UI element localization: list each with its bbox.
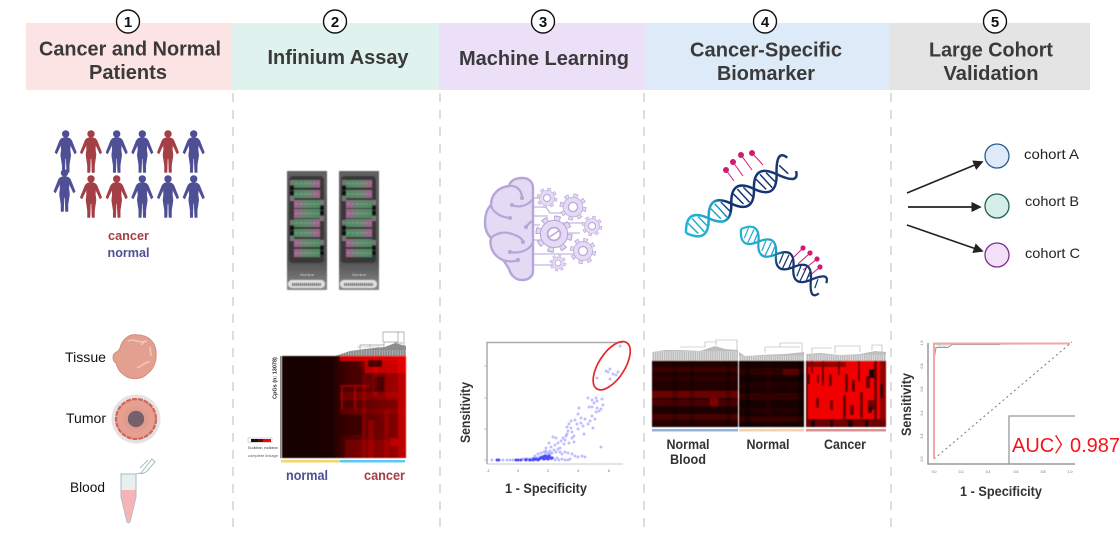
heading 1: Cancer and Normal Patients bbox=[39, 38, 221, 84]
icon: brain with gears bbox=[485, 178, 600, 280]
label: Normal: Normal bbox=[746, 437, 790, 452]
label: Blood: Blood bbox=[70, 479, 105, 495]
heading 1: Cancer and Normal Patients: Cancer and Normal bbox=[39, 38, 221, 60]
methyl groups on large helix bbox=[723, 150, 763, 181]
chart: normal blood heatmap bbox=[652, 340, 738, 432]
cohort A circle bbox=[985, 144, 1009, 168]
highlighted cluster ellipse bbox=[586, 336, 638, 396]
chart: normal heatmap bbox=[739, 343, 804, 432]
step number 2: 2 bbox=[331, 14, 339, 31]
axis label: 1 - Specificity: 1 - Specificity bbox=[505, 480, 587, 496]
step number 3: 3 bbox=[539, 14, 547, 31]
chart: ROC curve: 0.2 bbox=[959, 470, 963, 474]
step number 5: 5 bbox=[991, 14, 999, 31]
step number 3 bbox=[532, 10, 554, 33]
label: cohort A: cohort A bbox=[1024, 146, 1080, 162]
icon: tissue bbox=[113, 335, 156, 379]
label: cohort C: cohort C bbox=[1025, 245, 1080, 261]
heatmap dendrogram bbox=[335, 332, 406, 356]
arrow to cohort C bbox=[907, 225, 982, 251]
label: Cancer: Cancer bbox=[824, 437, 867, 452]
step number 5 bbox=[984, 10, 1006, 33]
step number 1 bbox=[116, 10, 140, 33]
chart: ROC curve: 0.8 bbox=[1041, 470, 1045, 474]
step number 1: 1 bbox=[124, 14, 132, 31]
label: cancer: cancer bbox=[364, 467, 405, 483]
chart: ROC curve bbox=[920, 341, 1075, 474]
icon: tumor bbox=[112, 394, 160, 444]
heading 4: Cancer-Specific Biomarker bbox=[690, 40, 842, 85]
icon: sequencer chips: Illumina bbox=[352, 272, 367, 277]
large helix bbox=[679, 153, 799, 244]
chart: scatter plot: 0 bbox=[517, 469, 519, 473]
label: normal: normal bbox=[286, 467, 328, 483]
heading 3: Machine Learning: Machine Learning bbox=[459, 48, 629, 70]
heatmap colour key: complete linkage bbox=[248, 454, 278, 458]
methyl groups on small helix bbox=[794, 245, 823, 277]
icon: blood tube bbox=[121, 459, 155, 523]
cohort C circle bbox=[985, 243, 1009, 267]
icon: DNA with methyl groups bbox=[679, 150, 829, 297]
chart: scatter plot: 2 bbox=[547, 469, 549, 473]
label: CpGs axis: CpGs (n: 13078) bbox=[272, 357, 278, 399]
label: Normal Blood: Normal bbox=[666, 437, 710, 452]
arrow to cohort A bbox=[907, 162, 982, 193]
chart: ROC curve: 0.0 bbox=[920, 457, 924, 461]
chart: ROC curve: 0.8 bbox=[920, 364, 924, 368]
chart: scatter plot bbox=[484, 336, 638, 473]
icon: patient figures bbox=[54, 131, 205, 218]
chart: ROC curve: 0.6 bbox=[1014, 470, 1018, 474]
heading 5: Large Cohort Validation: Validation bbox=[944, 63, 1038, 85]
arrow to cohort B bbox=[908, 206, 980, 208]
label: Tumor: Tumor bbox=[66, 410, 106, 426]
chart: CpG heatmap bbox=[280, 332, 406, 462]
heading 1: Cancer and Normal Patients: Patients bbox=[89, 62, 167, 84]
chart: scatter plot: -2 bbox=[486, 469, 490, 473]
callout: AUC value: 0.987 bbox=[1070, 435, 1120, 457]
step number 2 bbox=[324, 10, 346, 33]
callout: AUC value: AUC bbox=[1012, 435, 1054, 457]
chart: scatter plot: 4 bbox=[577, 469, 579, 473]
legend: cancer / normal: cancer bbox=[108, 228, 149, 243]
heading 5: Large Cohort Validation bbox=[929, 40, 1053, 85]
heading 4: Cancer-Specific Biomarker: Biomarker bbox=[717, 63, 815, 85]
label: Normal Blood: Blood bbox=[670, 452, 706, 467]
chart: ROC curve: 0.4 bbox=[920, 411, 924, 415]
label: Tissue: Tissue bbox=[65, 349, 106, 365]
chart: ROC curve: 1.0 bbox=[1068, 470, 1072, 474]
chart: ROC curve: 0.0 bbox=[932, 470, 936, 474]
chart: ROC curve: 0.2 bbox=[920, 434, 924, 438]
heatmap colour key: Euclidean, euclidean bbox=[248, 446, 278, 450]
heading 5: Large Cohort Validation: Large Cohort bbox=[929, 40, 1053, 62]
chart: cancer heatmap bbox=[806, 345, 886, 432]
small helix bbox=[735, 220, 829, 297]
legend: cancer / normal bbox=[108, 228, 150, 260]
cohort B circle bbox=[985, 194, 1009, 218]
heading 2: Infinium Assay: Infinium Assay bbox=[268, 47, 409, 69]
legend: cancer / normal: normal bbox=[108, 245, 150, 260]
chart: scatter plot: 6 bbox=[608, 469, 610, 473]
icon: sequencer chips: Illumina bbox=[300, 272, 315, 277]
chart: ROC curve: 0.4 bbox=[986, 470, 990, 474]
axis label: Sensitivity: Sensitivity bbox=[898, 373, 914, 436]
step number 4 bbox=[754, 10, 776, 33]
chart: ROC curve: 1.0 bbox=[920, 341, 924, 345]
step number 4: 4 bbox=[761, 14, 770, 31]
heading 4: Cancer-Specific Biomarker: Cancer-Specific bbox=[690, 40, 842, 62]
axis label: Sensitivity: Sensitivity bbox=[457, 382, 473, 443]
callout: AUC value: 〉 bbox=[1054, 435, 1074, 457]
chart: ROC curve: 0.6 bbox=[920, 387, 924, 391]
panel backgrounds: header band bbox=[26, 23, 1090, 90]
heatmap colour key bbox=[248, 438, 278, 458]
scatter points bbox=[492, 346, 620, 460]
axis label: 1 - Specificity: 1 - Specificity bbox=[960, 483, 1042, 499]
label: Normal Blood bbox=[666, 437, 710, 467]
label: cohort B: cohort B bbox=[1025, 193, 1079, 209]
icon: sequencer chips bbox=[287, 171, 379, 290]
